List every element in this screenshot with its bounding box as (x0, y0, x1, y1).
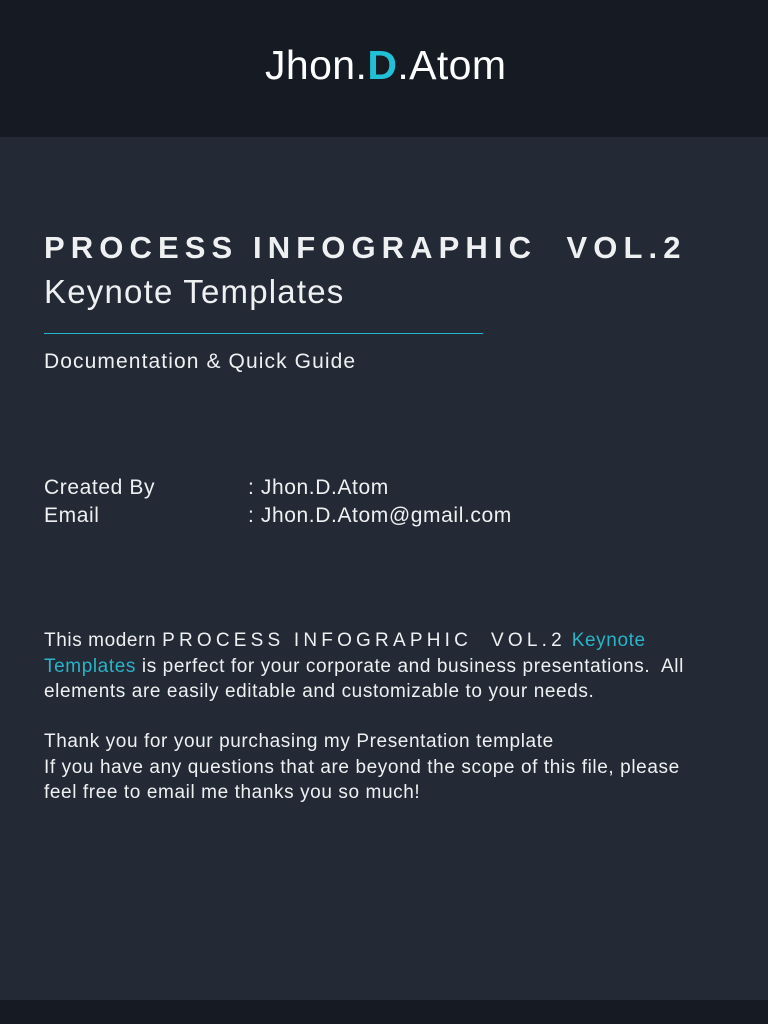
logo: Jhon.D.Atom (265, 42, 506, 88)
thanks paragraph: If you have any questions that are beyond the scope of this file, please (44, 756, 680, 778)
creator info (44, 476, 512, 527)
creator info: : Jhon.D.Atom@gmail.com (248, 504, 512, 527)
creator info: Email (44, 504, 100, 527)
description paragraph: This modern PROCESS INFOGRAPHIC VOL.2 Keynote (44, 630, 646, 651)
description paragraph: elements are easily editable and customizable to your needs. (44, 681, 594, 702)
subtitle: Keynote Templates (44, 273, 344, 310)
thanks paragraph: feel free to email me thanks you so much! (44, 782, 420, 803)
divider line (44, 333, 483, 334)
creator info: Created By (44, 476, 155, 499)
documentation heading: Documentation & Quick Guide (44, 350, 356, 373)
header bar (0, 0, 768, 137)
description paragraph (44, 630, 684, 702)
description paragraph: Templates is perfect for your corporate and business presentations. All (44, 656, 684, 676)
footer bar (0, 1000, 768, 1024)
thanks paragraph: Thank you for your purchasing my Presentation template (44, 731, 554, 752)
title: PROCESS INFOGRAPHIC VOL.2 (44, 230, 687, 265)
thanks paragraph (44, 731, 680, 803)
creator info: : Jhon.D.Atom (248, 476, 389, 499)
